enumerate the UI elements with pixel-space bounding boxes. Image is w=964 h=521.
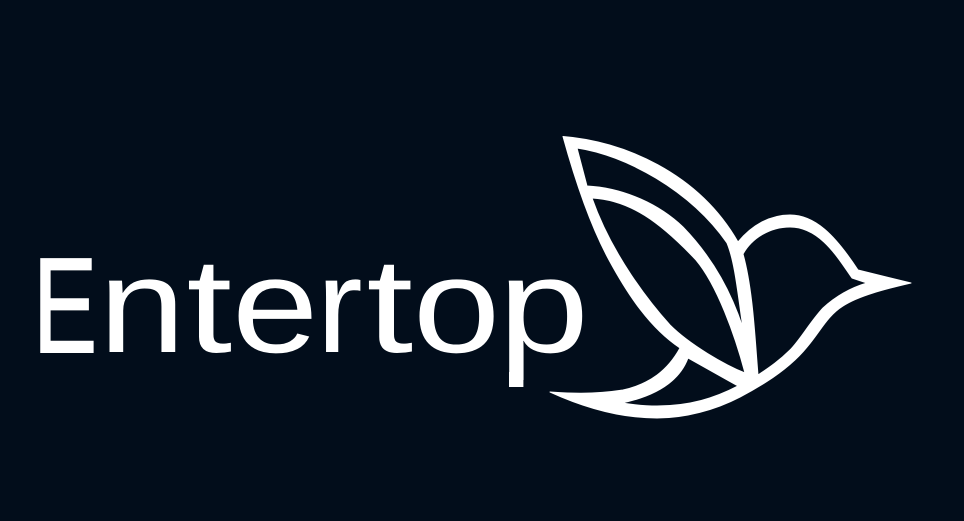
wordmark: Entertop (33, 229, 589, 387)
wordmark: Entertop: p (498, 229, 589, 381)
wordmark: Entertop: r (316, 231, 363, 382)
wordmark: Entertop: E (33, 230, 97, 381)
wordmark: Entertop: t (186, 230, 232, 381)
wordmark: Entertop: n (99, 230, 185, 381)
wordmark: Entertop: t (366, 231, 413, 381)
icon: bird outline (550, 136, 911, 418)
wordmark: Entertop: e (232, 230, 318, 381)
wordmark: Entertop: o (413, 230, 500, 382)
